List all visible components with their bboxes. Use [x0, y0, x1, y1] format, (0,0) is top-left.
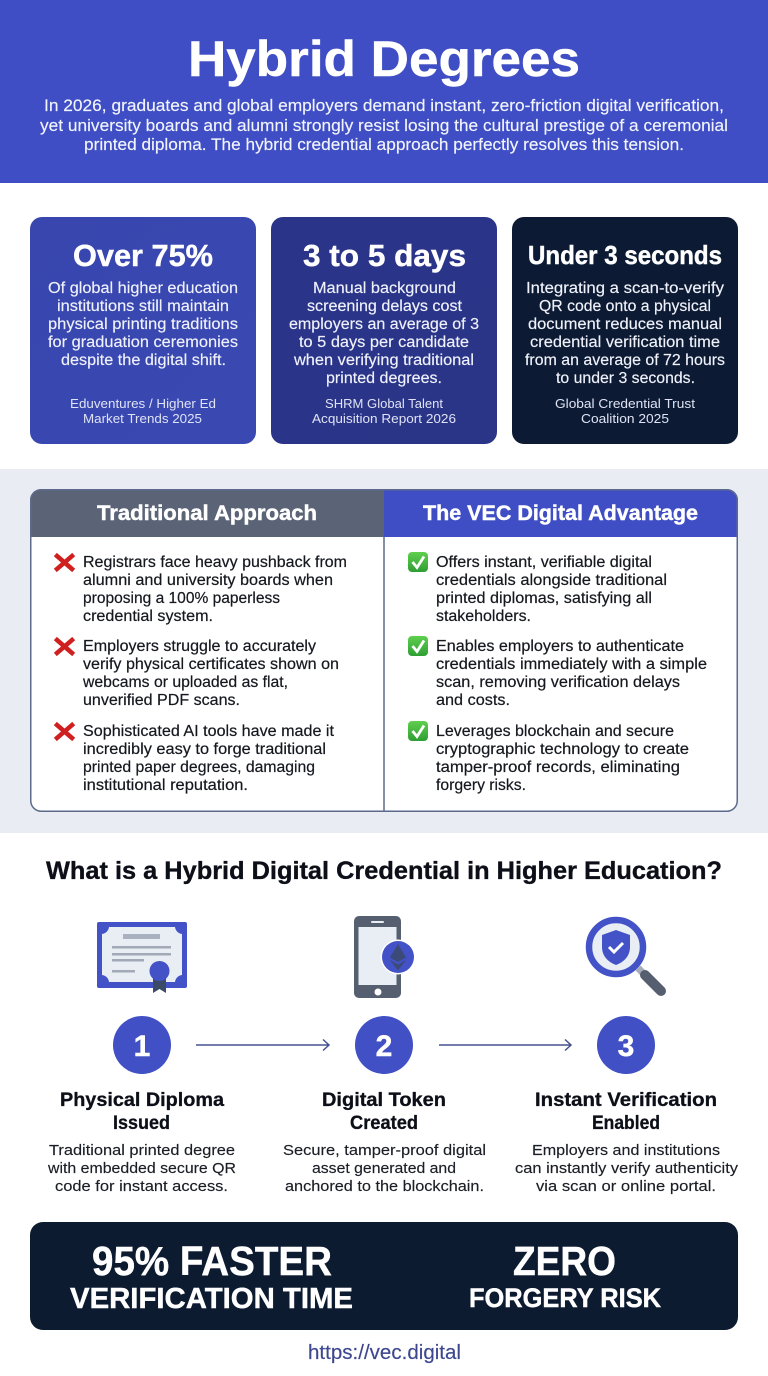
- intro text: [40, 96, 728, 154]
- step 1 text: Traditional printed degree: [49, 1142, 235, 1159]
- stat card: 3 to 5 days: when verifying traditional: [293, 352, 474, 369]
- stat card: 3 to 5 days: to 5 days per candidate: [299, 334, 469, 351]
- item: tamper-proof records: forgery risks.: [436, 777, 526, 794]
- stat: 95% faster: VERIFICATION TIME: [70, 1283, 353, 1315]
- stat card: under 3 seconds: Coalition 2025: [581, 411, 669, 426]
- step 3 text: Enabled: [592, 1113, 660, 1134]
- item: AI forgery: [57, 723, 335, 794]
- item: verification struggle: webcams or uploaded as flat,: [82, 674, 288, 691]
- header banner: [0, 0, 768, 183]
- item: verification struggle: unverified PDF scans.: [83, 692, 240, 709]
- item: alumni pushback: [57, 554, 347, 625]
- item: instant credentials: printed diplomas, satisfying all: [436, 590, 652, 607]
- stat: 95% faster: [70, 1238, 353, 1315]
- icon: phone with token: [354, 916, 416, 998]
- item: AI forgery: institutional reputation.: [83, 777, 248, 794]
- title: Hybrid Degrees: [188, 31, 580, 87]
- stat card: under 3 seconds: QR code onto a physical: [539, 298, 711, 315]
- stat card: over 75%: despite the digital shift.: [61, 352, 226, 369]
- step 2 text: [283, 1090, 486, 1195]
- item: alumni pushback: proposing a 100% paperless: [83, 590, 280, 607]
- process heading: What is a Hybrid Digital Credential in Higher Education?: [46, 857, 722, 885]
- column: VEC digital advantage: [408, 502, 707, 794]
- stat card: under 3 seconds: document reduces manual: [528, 316, 722, 333]
- step 3 text: [515, 1090, 739, 1195]
- stat: zero forgery: FORGERY RISK: [469, 1283, 661, 1313]
- icon: diploma: [97, 922, 187, 993]
- step 1 badge: 1: [134, 1030, 150, 1063]
- stat card: 3 to 5 days: printed degrees.: [326, 370, 442, 387]
- item: AI forgery: incredibly easy to forge traditional: [83, 741, 326, 758]
- item: alumni pushback: credential system.: [83, 608, 213, 625]
- stat card: under 3 seconds: Global Credential Trust: [555, 396, 695, 411]
- item: verification struggle: verify physical certificates shown on: [83, 656, 339, 673]
- item: verification struggle: [57, 638, 339, 709]
- stat card: under 3 seconds: to under 3 seconds.: [556, 370, 695, 387]
- intro text: yet university boards and alumni strongly resist losing the cultural prestige of a ceremonial: [40, 116, 728, 135]
- step 1 text: code for instant access.: [55, 1178, 228, 1195]
- item: immediate authentication: [408, 636, 707, 709]
- step 2 badge: [355, 1016, 413, 1074]
- step 3 badge: 3: [618, 1030, 634, 1063]
- step 2 text: asset generated and: [312, 1160, 456, 1177]
- arrow: step 1 to step 2: [196, 1040, 329, 1050]
- step 3 text: Instant Verification: [535, 1090, 717, 1111]
- stat card: under 3 seconds: Integrating a scan-to-verify: [526, 280, 724, 297]
- intro text: printed diploma. The hybrid credential approach perfectly resolves this tension.: [84, 135, 684, 154]
- step 2 text: Created: [350, 1113, 418, 1134]
- step 2 text: Digital Token: [322, 1090, 446, 1111]
- stat card: over 75%: [30, 217, 256, 444]
- item: immediate authentication: scan, removing verification delays: [436, 674, 680, 691]
- stat card: 3 to 5 days: employers an average of 3: [289, 316, 479, 333]
- stat card: under 3 seconds: credential verification time: [530, 334, 720, 351]
- item: instant credentials: credentials alongside traditional: [436, 572, 667, 589]
- stat card: over 75%: institutions still maintain: [57, 298, 229, 315]
- item: AI forgery: printed paper degrees, damaging: [83, 759, 315, 776]
- stat card: over 75%: physical printing traditions: [48, 316, 238, 333]
- stat: zero forgery: ZERO: [513, 1238, 616, 1284]
- step 2 text: Secure, tamper-proof digital: [283, 1142, 486, 1159]
- column: traditional approach: Traditional Approach: [97, 502, 317, 525]
- step 2 badge: 2: [376, 1030, 392, 1063]
- stat card: 3 to 5 days: Acquisition Report 2026: [312, 411, 456, 426]
- intro text: In 2026, graduates and global employers demand instant, zero-friction digital verification,: [44, 96, 724, 115]
- item: instant credentials: stakeholders.: [436, 608, 531, 625]
- step 2 text: anchored to the blockchain.: [285, 1178, 484, 1195]
- stat card: under 3 seconds: from an average of 72 hours: [525, 352, 725, 369]
- step 1 text: [47, 1090, 236, 1195]
- footer url: https://vec.digital: [308, 1342, 461, 1364]
- step 1 text: with embedded secure QR: [47, 1160, 236, 1177]
- comparison table: [30, 489, 738, 812]
- stat card: over 75%: Over 75%: [73, 238, 213, 273]
- step 1 text: Issued: [113, 1113, 170, 1134]
- item: tamper-proof records: [408, 721, 689, 794]
- stat card: 3 to 5 days: SHRM Global Talent: [325, 396, 443, 411]
- bottom stats banner: [30, 1222, 738, 1330]
- item: verification struggle: Employers struggle to accurately: [83, 638, 316, 655]
- stat card: over 75%: Eduventures / Higher Ed: [70, 396, 216, 411]
- column: traditional approach: [57, 502, 347, 794]
- item: immediate authentication: credentials immediately with a simple: [436, 656, 707, 673]
- stat card: 3 to 5 days: [271, 217, 497, 444]
- comparison section background: [0, 469, 768, 833]
- item: alumni pushback: Registrars face heavy pushback from: [83, 554, 347, 571]
- column: VEC digital advantage: The VEC Digital Advantage: [423, 502, 698, 525]
- stat: zero forgery: [469, 1238, 661, 1313]
- stat card: over 75%: Of global higher education: [48, 280, 238, 297]
- stat card: 3 to 5 days: screening delays cost: [307, 298, 463, 315]
- item: immediate authentication: and costs.: [436, 692, 510, 709]
- stat card: 3 to 5 days: Manual background: [313, 280, 456, 297]
- stat card: under 3 seconds: [512, 217, 738, 444]
- item: tamper-proof records: tamper-proof records, eliminating: [436, 759, 680, 776]
- item: instant credentials: Offers instant, verifiable digital: [436, 554, 652, 571]
- arrow: step 2 to step 3: [439, 1040, 571, 1050]
- stat card: 3 to 5 days: 3 to 5 days: [303, 238, 466, 273]
- item: instant credentials: [408, 552, 667, 625]
- stat: 95% faster: 95% FASTER: [92, 1238, 332, 1284]
- stat card: over 75%: Market Trends 2025: [83, 411, 202, 426]
- item: tamper-proof records: Leverages blockchain and secure: [436, 723, 674, 740]
- item: AI forgery: Sophisticated AI tools have made it: [83, 723, 335, 740]
- step 3 text: via scan or online portal.: [536, 1178, 716, 1195]
- step 1 text: Physical Diploma: [60, 1090, 224, 1111]
- stat card: under 3 seconds: Under 3 seconds: [528, 240, 722, 270]
- stat card: over 75%: for graduation ceremonies: [48, 334, 238, 351]
- item: immediate authentication: Enables employers to authenticate: [436, 638, 684, 655]
- item: tamper-proof records: cryptographic technology to create: [436, 741, 689, 758]
- step 3 text: Employers and institutions: [532, 1142, 720, 1159]
- step 3 badge: [597, 1016, 655, 1074]
- item: alumni pushback: alumni and university boards when: [83, 572, 333, 589]
- icon: magnifier with shield: [589, 920, 661, 991]
- step 1 badge: [113, 1016, 171, 1074]
- step 3 text: can instantly verify authenticity: [515, 1160, 739, 1177]
